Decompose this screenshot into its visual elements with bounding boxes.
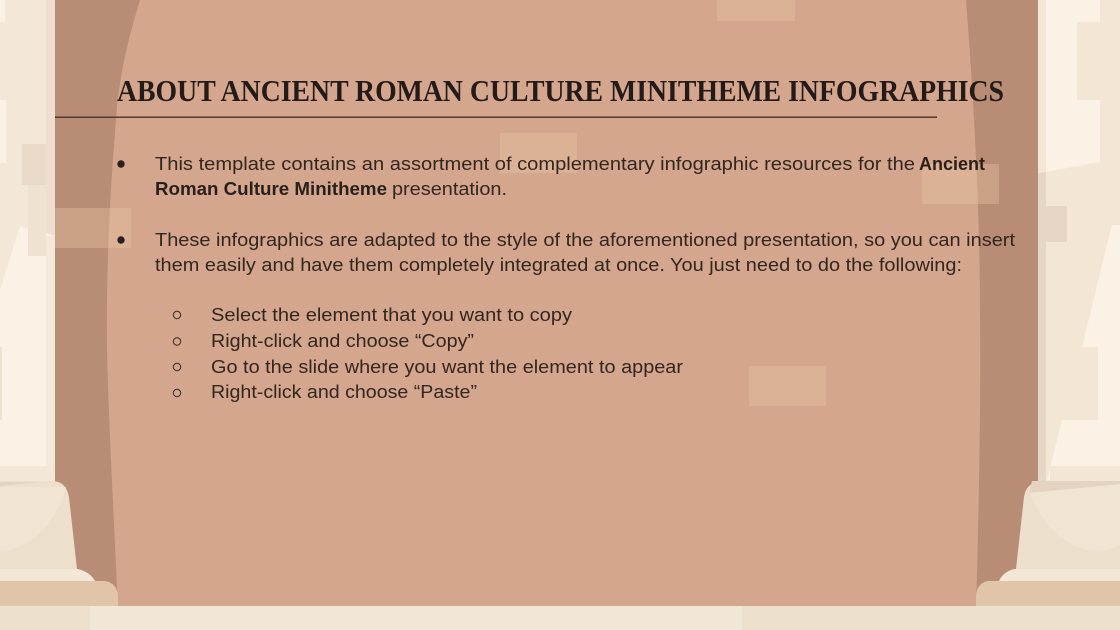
right curtain — [966, 0, 1040, 610]
floor — [0, 606, 1120, 630]
sub-bullet markers — [173, 311, 181, 397]
sub-list steps — [211, 304, 683, 402]
paragraph 1 — [155, 153, 985, 199]
paragraph 1: Roman Culture Minitheme — [155, 178, 387, 199]
sub-list steps: Right-click and choose “Paste” — [211, 381, 477, 402]
paragraph 2 — [155, 229, 1015, 275]
bullet dot 2 — [117, 236, 125, 244]
title underline — [55, 116, 937, 118]
left curtain — [55, 0, 140, 610]
paragraph 1: Ancient — [919, 153, 985, 174]
paragraph 1: This template contains an assortment of complementary infographic resources for the — [155, 153, 915, 174]
sub-list steps: Right-click and choose “Copy” — [211, 330, 474, 351]
left column — [0, 0, 55, 490]
sub-list steps: Select the element that you want to copy — [211, 304, 573, 325]
right column — [1038, 0, 1120, 490]
paragraph 2: them easily and have them completely integrated at once. You just need to do the following: — [155, 254, 962, 275]
decorative translucent squares — [55, 0, 999, 406]
right column base — [976, 481, 1120, 607]
bullet list — [117, 153, 1015, 402]
bullet dot 1 — [117, 160, 125, 168]
paragraph 2: These infographics are adapted to the style of the aforementioned presentation, so you can insert — [155, 229, 1015, 250]
left column base — [0, 481, 118, 607]
paragraph 1: presentation. — [392, 178, 507, 199]
title: ABOUT ANCIENT ROMAN CULTURE MINITHEME INFOGRAPHICS — [117, 73, 1004, 108]
sub-list steps: Go to the slide where you want the element to appear — [211, 356, 683, 377]
